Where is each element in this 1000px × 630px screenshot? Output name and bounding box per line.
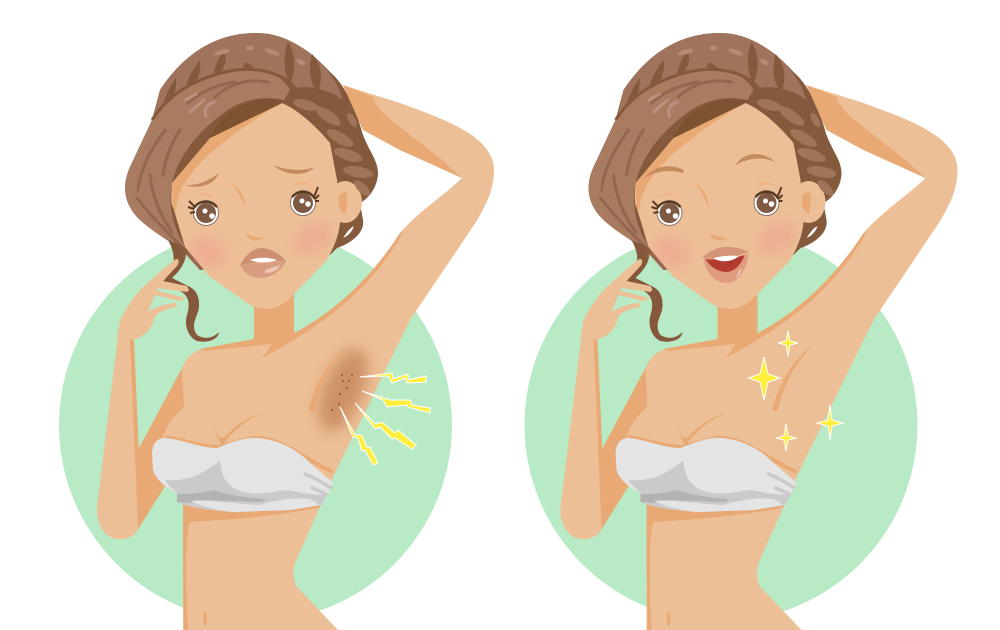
sparkles [748,331,843,451]
lightning bolts [340,373,430,465]
worried mouth [240,248,286,278]
woman body and hair [560,33,958,630]
right sparkle [817,405,843,440]
figure: before, irritated dark underarm [97,33,494,630]
upper sparkle [778,331,798,356]
background circle right [524,228,918,622]
lower sparkle [776,424,797,451]
underarm pores [331,374,353,411]
underarm fold [309,345,350,411]
facial features [184,182,338,274]
happy eyebrows [644,154,776,178]
underarm fold [772,345,814,411]
smiling open mouth [702,247,748,283]
worried eyebrows [185,165,315,187]
facial features [647,182,802,274]
large sparkle [748,357,780,400]
background circle left [59,228,452,622]
dark underarm patch [308,342,378,438]
woman body and hair [97,33,494,630]
figure: after, clean bright underarm [560,33,958,630]
